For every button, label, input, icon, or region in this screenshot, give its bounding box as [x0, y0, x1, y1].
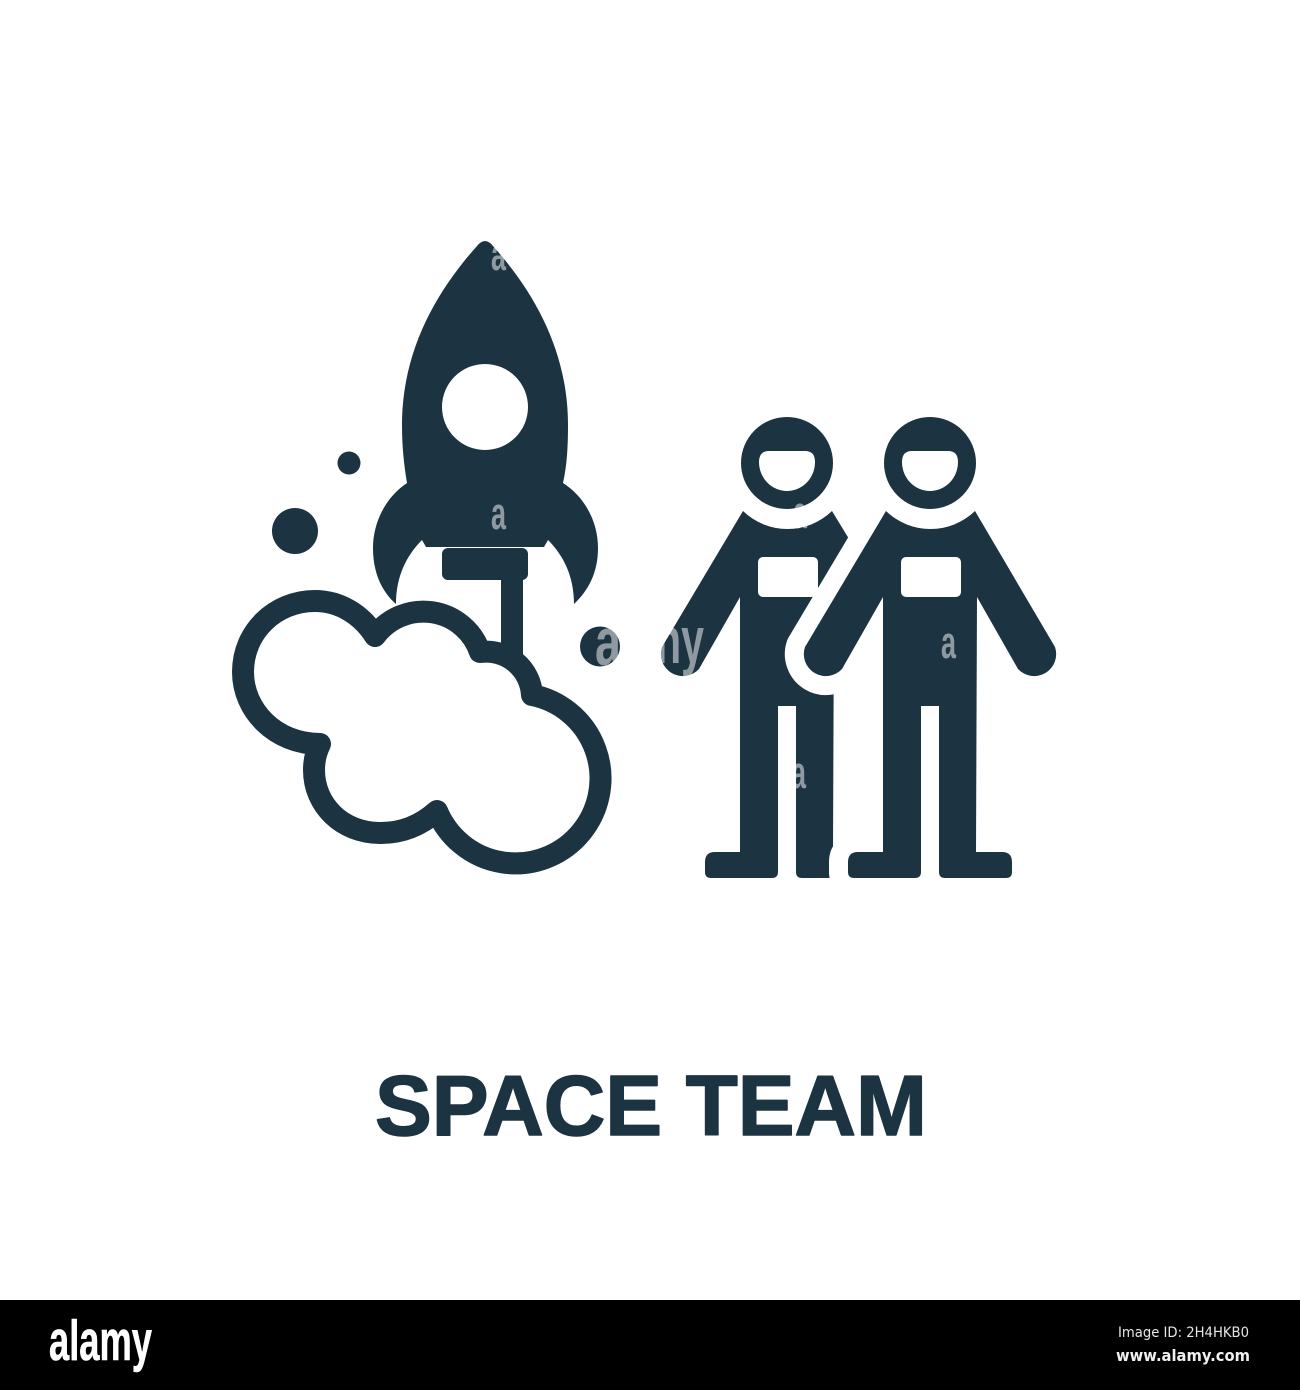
right suit: [804, 511, 1056, 878]
small bubble: [338, 452, 360, 474]
right chest badge: [901, 557, 961, 597]
left suit: [661, 511, 869, 878]
watermark letters: a: [793, 487, 808, 538]
right helmet: [884, 417, 976, 509]
left astronaut: [661, 417, 869, 878]
right bubble: [580, 626, 620, 666]
watermark letters: a: [941, 617, 957, 668]
exhaust stem: [501, 575, 523, 655]
icon: rocket launching from smoke cloud: [243, 241, 620, 863]
watermark letters: ny: [656, 603, 704, 677]
footer logo: alamy: [49, 1309, 152, 1373]
watermark letters: a: [491, 488, 507, 539]
watermark letters: a: [491, 229, 507, 280]
large bubble: [272, 508, 318, 554]
watermark letters: a: [595, 604, 622, 680]
left chest badge: [758, 557, 818, 597]
right visor: [902, 451, 958, 491]
watermark letters: [491, 229, 957, 798]
smoke cloud: [243, 601, 600, 863]
rocket body with fins: [373, 241, 598, 604]
title: SPACE TEAM: [375, 1059, 927, 1154]
right astronaut: [804, 417, 1056, 878]
rocket nozzle: [442, 548, 528, 580]
left helmet: [741, 417, 833, 509]
left visor: [759, 451, 815, 491]
rocket porthole: [442, 364, 528, 450]
footer bar: [0, 1300, 1300, 1390]
watermark letters: a: [791, 747, 807, 798]
image id: Image ID: 2H4HKB0: [1118, 1325, 1249, 1341]
website: www.alamy.com: [1116, 1346, 1250, 1365]
icon: two astronauts: [661, 417, 1056, 878]
